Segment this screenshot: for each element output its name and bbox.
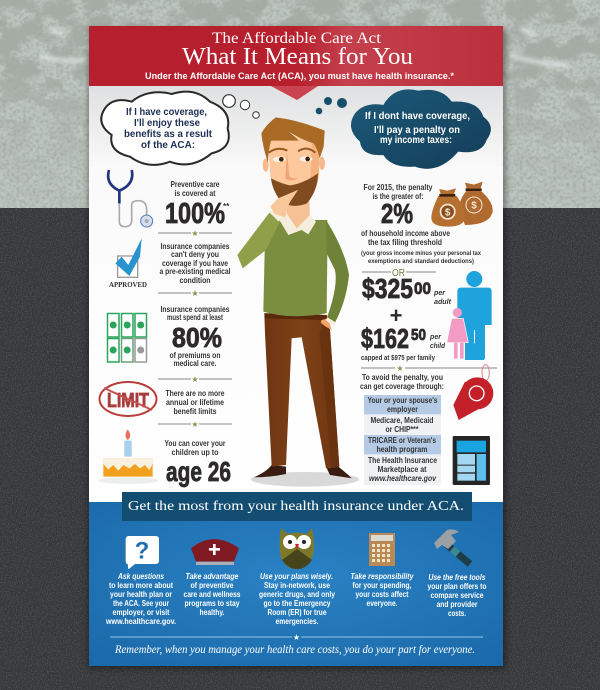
benefit: no limits: annual or lifetime <box>166 398 224 407</box>
bottom divider: ★ <box>293 633 300 642</box>
penalty: flat amounts: per <box>429 334 442 341</box>
benefit: no denial: a pre-existing medical <box>160 267 230 276</box>
tip: ask questions: your health plan or <box>110 590 172 599</box>
benefit: age 26 <box>98 429 231 487</box>
background: marble wall <box>0 0 600 208</box>
benefit: no denial: condition <box>180 276 211 285</box>
tip: take responsibility: your costs affect <box>356 590 409 599</box>
thought bubble: have coverage: I'll enjoy these <box>134 118 200 129</box>
benefit: age 26: children up to <box>172 448 219 457</box>
penalty: 2 percent <box>361 182 493 265</box>
benefit: 80 percent: Insurance companies <box>160 305 230 314</box>
head drawn in head-crop coordinates <box>261 117 325 217</box>
icon: limit stamp: LIMIT <box>107 390 149 412</box>
divider 1: ★ <box>191 229 199 238</box>
thought bubble: have coverage <box>101 92 229 165</box>
closing message: Remember, when you manage your health care costs, you do your part for everyone. <box>114 644 475 656</box>
option: employer: employer <box>387 405 418 414</box>
penalty: flat amounts: adult <box>434 299 452 306</box>
tip: use plan wisely: Stay in-network, use <box>264 581 330 590</box>
tip: free tools: your plan offers to <box>428 582 487 591</box>
benefit: preventive care: is covered at <box>174 189 216 198</box>
divider: OR <box>362 268 436 279</box>
option: marketplace <box>364 455 441 485</box>
coverage options <box>360 373 444 485</box>
tip: use plan wisely <box>259 528 335 626</box>
divider 5: ★ <box>396 364 404 373</box>
divider 2 <box>158 289 232 298</box>
tip: ask questions: to learn more about <box>109 581 173 590</box>
benefit: no denial: coverage if you have <box>162 259 228 268</box>
tip: preventive care: healthy. <box>200 608 224 617</box>
option: employer <box>364 395 441 414</box>
amount: adult: $325 <box>362 273 413 304</box>
icon: approved checkmark <box>115 238 142 277</box>
poster shadow <box>88 28 506 669</box>
tip: free tools: Use the free tools <box>428 573 486 582</box>
option: TRICARE <box>364 435 441 454</box>
benefit: no limits: benefit limits <box>174 407 217 416</box>
icon: nurse cap <box>191 539 239 565</box>
tip: free tools: costs. <box>448 609 466 618</box>
banner heading <box>122 492 472 521</box>
icon: calculator <box>369 533 395 566</box>
penalty: flat amounts: capped at $975 per family <box>361 355 435 362</box>
divider 1 <box>158 229 232 238</box>
option: Medicare: Medicare, Medicaid <box>370 416 434 425</box>
penalty: flat amounts <box>361 271 492 362</box>
tip: free tools: and provider <box>436 600 478 609</box>
penalty: 2 percent: (your gross income minus your personal tax <box>361 250 481 257</box>
thought bubble: no coverage: my income taxes: <box>380 135 452 146</box>
benefit: preventive care: Preventive care <box>170 180 220 189</box>
icon: money bags: $ <box>471 201 477 212</box>
icon: hammer <box>434 529 470 564</box>
divider 4: ★ <box>191 420 199 429</box>
thought dots: outline <box>223 95 259 118</box>
divider 2: ★ <box>191 289 199 298</box>
penalty: 2 percent: exemptions and standard deductions) <box>368 258 474 265</box>
coverage options: can get coverage through: <box>360 382 444 391</box>
benefit: no limits <box>100 382 225 416</box>
thought bubble: have coverage: If I have coverage, <box>126 107 207 118</box>
tip: take responsibility: for your spending, <box>352 581 412 590</box>
icon: question bubble: ? <box>135 537 149 564</box>
header pointer <box>271 86 318 100</box>
panel: blue tips section <box>89 492 503 666</box>
tip: take responsibility: everyone. <box>366 599 398 608</box>
tip: free tools <box>428 529 487 618</box>
icon: birthday cake <box>98 429 158 484</box>
tip: use plan wisely: Room (ER) for true <box>268 608 327 617</box>
divider 4 <box>158 420 232 429</box>
icon: money bags: $ <box>445 207 451 218</box>
divider 5 <box>361 364 497 373</box>
option: TRICARE: TRICARE or Veteran's <box>368 436 436 445</box>
thought bubble: no coverage <box>351 89 491 169</box>
tip: take responsibility: Take responsibility <box>350 572 414 581</box>
divider 3: ★ <box>191 375 199 384</box>
panel: red header <box>89 26 503 100</box>
label: approved: APPROVED <box>109 281 147 289</box>
tip: use plan wisely: go to the Emergency <box>264 599 331 608</box>
tip: ask questions: the ACA. See your <box>113 599 169 608</box>
divider 3 <box>158 375 232 384</box>
panel: poster paper <box>89 86 503 503</box>
stat: 100%: 100% <box>165 198 225 230</box>
penalty: 2 percent: the tax filing threshold <box>368 238 442 247</box>
tip: preventive care: of preventive <box>190 581 234 590</box>
benefit: 80 percent <box>108 305 230 368</box>
icon: owl <box>280 528 314 569</box>
header subtitle: Under the Affordable Care Act (ACA), you must have health insurance.* <box>145 71 454 82</box>
background: dark asphalt <box>0 208 600 690</box>
option: TRICARE: health program <box>376 445 428 454</box>
option: marketplace: The Health Insurance <box>368 456 437 465</box>
tip: preventive care <box>184 539 241 617</box>
penalty: 2 percent: of household income above <box>361 229 450 238</box>
benefit: no denial <box>109 238 230 289</box>
icon: adult and child figures <box>447 271 492 360</box>
thought bubble: no coverage: I'll pay a penalty on <box>374 125 460 136</box>
banner heading: Get the most from your health insurance under ACA. <box>128 499 464 514</box>
tip: use plan wisely: emergencies. <box>276 617 318 626</box>
option: marketplace: Marketplace at <box>378 465 427 474</box>
benefit: preventive care <box>108 170 230 230</box>
divider: OR: OR <box>392 268 405 279</box>
tip: preventive care: programs to stay <box>184 599 240 608</box>
penalty: flat amounts: 00 <box>414 279 431 298</box>
benefit: 80 percent: must spend at least <box>167 313 223 322</box>
tip: ask questions: Ask questions <box>117 572 164 581</box>
icon: tablet <box>453 436 490 485</box>
option: marketplace: www.healthcare.gov <box>369 474 436 483</box>
benefit: no denial: Insurance companies <box>160 242 230 251</box>
icon: red whistle <box>453 365 493 420</box>
benefit: 80 percent: of premiums on <box>170 351 221 360</box>
penalty: 2 percent: For 2015, the penalty <box>364 183 433 192</box>
tip: ask questions: employer, or visit <box>112 608 170 617</box>
icon: money bags <box>431 182 493 227</box>
benefit: 80 percent: medical care. <box>174 359 216 368</box>
option: employer: Your or your spouse's <box>368 396 438 405</box>
plus sign: + <box>390 303 402 328</box>
tip: ask questions <box>105 536 176 626</box>
tip: preventive care: Take advantage <box>186 572 239 581</box>
thought dots: dark <box>316 97 347 114</box>
header title small: The Affordable Care Act <box>212 30 382 47</box>
tip: take responsibility <box>350 533 414 608</box>
illustration: thinking man <box>237 117 359 487</box>
penalty: flat amounts: per <box>433 290 446 297</box>
tip: free tools: compare service <box>430 591 484 600</box>
thought bubble: no coverage: If I dont have coverage, <box>365 111 470 122</box>
thought bubble: have coverage: of the ACA: <box>141 140 195 151</box>
amount: child: $162 <box>361 323 409 354</box>
penalty: flat amounts: child <box>430 343 446 350</box>
tip: preventive care: care and wellness <box>184 590 241 599</box>
option: Medicare <box>364 415 441 435</box>
stat: 80%: 80% <box>172 322 222 353</box>
benefit: preventive care: ** <box>223 202 230 211</box>
penalty: flat amounts: 50 <box>411 327 426 344</box>
thought bubble: have coverage: benefits as a result <box>124 129 213 140</box>
tip: use plan wisely: Use your plans wisely. <box>260 572 333 581</box>
option: Medicare: or CHIP*** <box>386 425 419 434</box>
benefit: no denial: can't deny you <box>171 250 219 259</box>
header title large: What It Means for You <box>182 44 413 70</box>
stat: age 26: age 26 <box>166 456 231 487</box>
benefit: age 26: You can cover your <box>164 439 226 448</box>
benefit: no limits: There are no more <box>166 389 225 398</box>
icon: stethoscope <box>108 170 153 227</box>
tip: ask questions: www.healthcare.gov. <box>105 617 176 626</box>
stat: 2%: 2% <box>381 198 413 229</box>
coverage options: To avoid the penalty, you <box>362 373 443 382</box>
icon: money bills <box>108 314 146 362</box>
penalty: 2 percent: is the greater of: <box>372 192 424 201</box>
tip: use plan wisely: generic drugs, and only <box>259 590 335 599</box>
